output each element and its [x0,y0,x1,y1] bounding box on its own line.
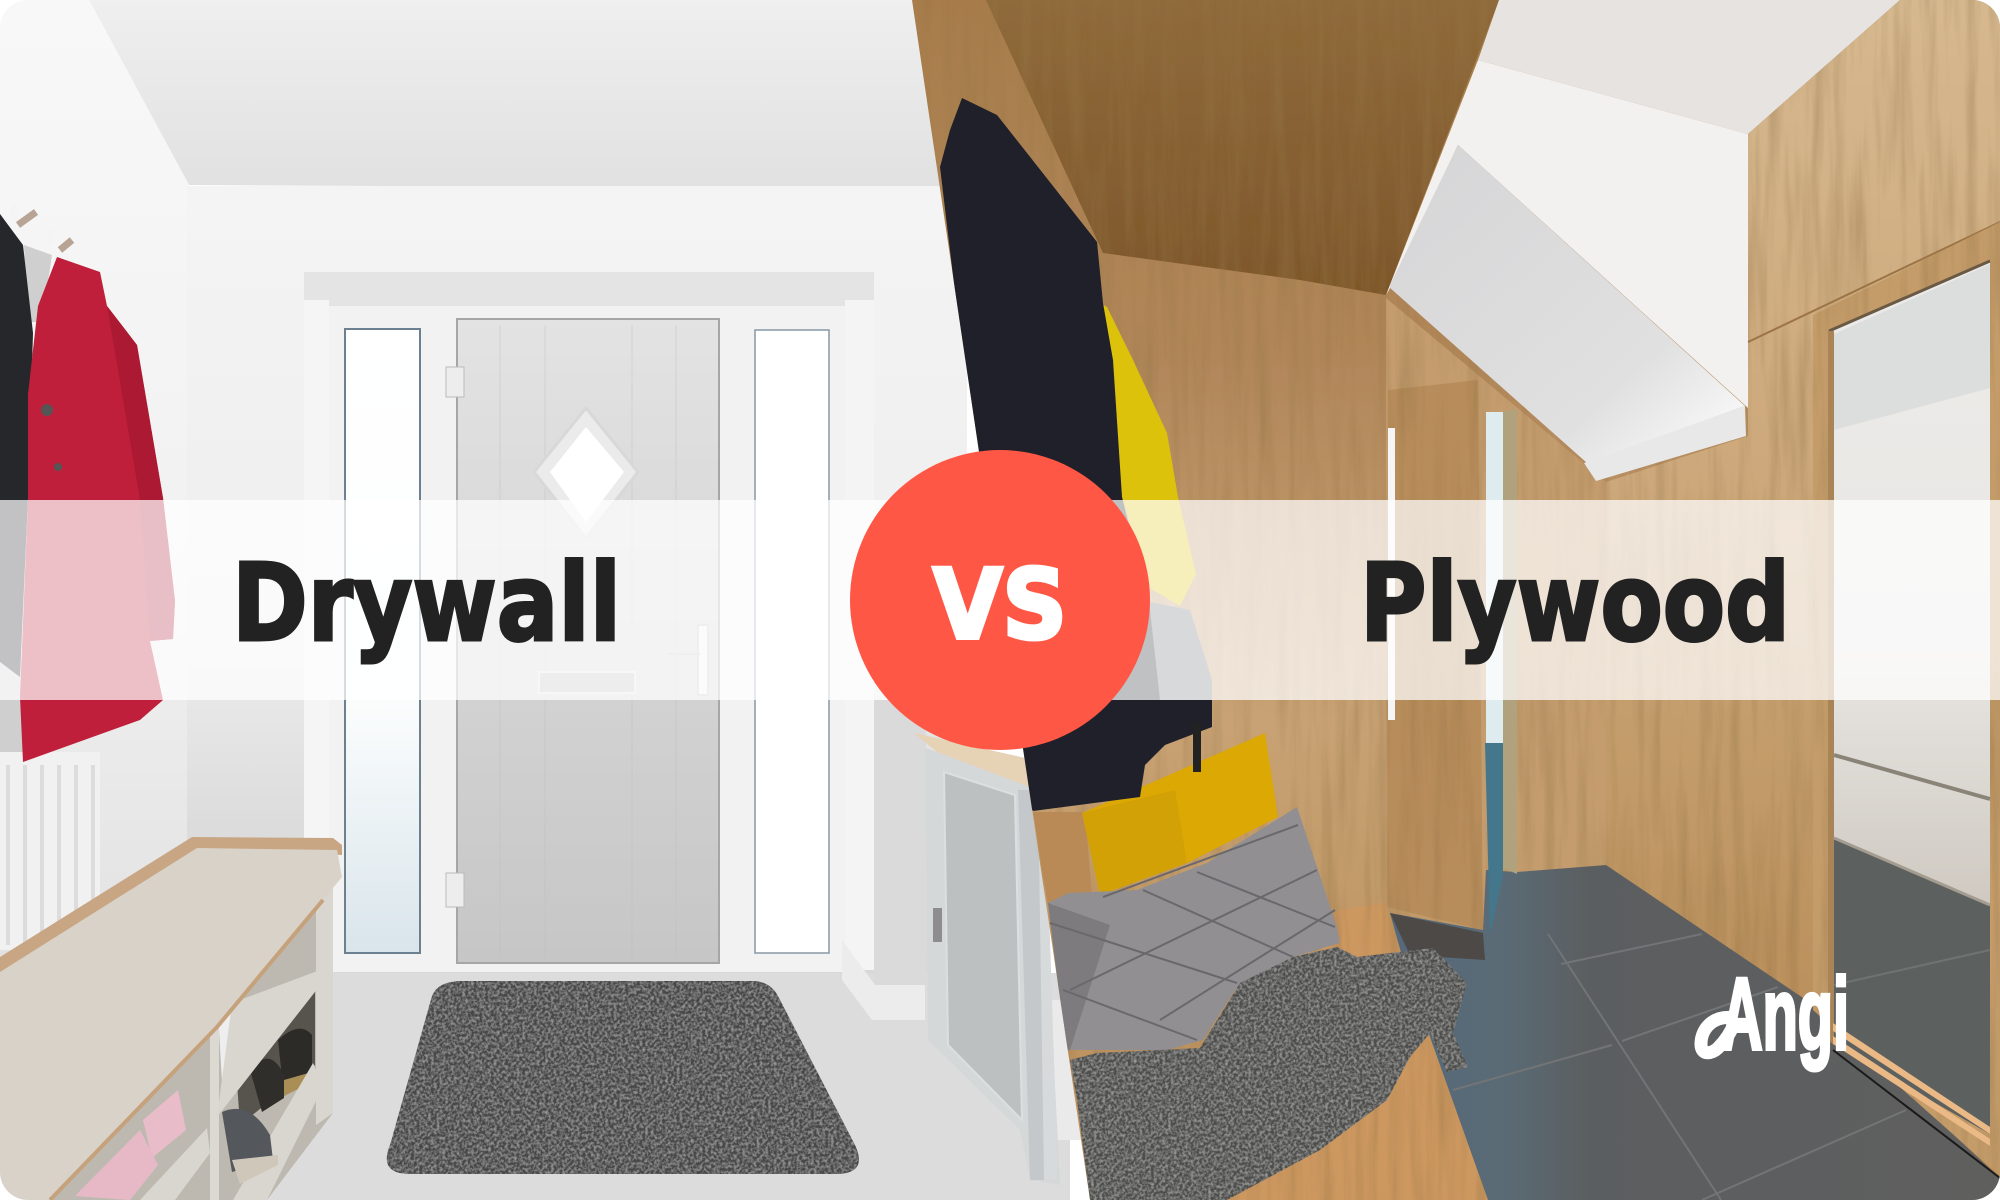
floor shadow under door [1390,913,1485,960]
door panel grooves [500,325,676,762]
soffit lip [1584,406,1746,481]
hinges [446,367,464,397]
shoes [219,1014,230,1080]
shelf interior shadow [238,992,315,1114]
floor tile joints [1453,934,1906,1200]
dark sleeve [107,306,175,641]
soffit [1389,145,1745,463]
door frame [329,700,845,972]
grey jacket [1140,600,1212,720]
logo: Angi: Angi [1721,957,1849,1071]
mirror ceiling reflection [1834,264,1990,430]
mirror floor [1833,838,1990,1134]
cabinet lock [933,908,942,942]
buttons [41,404,53,416]
wood bench [1227,903,1488,1200]
bench front edge [50,900,323,1200]
ceiling [89,0,945,189]
door mat [387,981,859,1174]
cabinet side [1018,790,1058,1180]
heading: Drywall: Drywall [232,542,621,666]
mirror frame [1813,222,2000,1176]
side wall [0,0,189,960]
door handle [1388,428,1395,720]
wood back wall [912,0,2000,1200]
yellow pillow [1082,733,1278,895]
wall behind cabinet [1052,1000,1081,1140]
radiator [0,752,100,950]
mirror frame top edge [1829,261,1990,331]
white wall [1386,60,1748,408]
panel: drywall entryway photo [0,0,1085,1200]
wood ceiling [986,0,1499,295]
wall panel joint [1748,222,2000,342]
grey blanket [1070,947,1468,1200]
letter box [539,672,635,693]
right side glass [755,330,829,953]
diamond window [536,411,636,500]
shelf boards [217,970,322,1117]
coat strap [1193,722,1201,772]
red coat [20,257,175,762]
bench cushion [0,848,342,1200]
floor [200,973,1070,1200]
door handle [668,625,708,695]
white shirt [24,245,52,322]
right wall lower [874,700,926,758]
door recess [304,272,874,970]
floor [1390,865,2000,1200]
white ceiling [1478,0,1900,134]
centre post [210,1027,219,1200]
wood door [1387,380,1483,930]
far wood wall [1386,298,1606,900]
bench shelf unit [50,880,333,1200]
wall under coats [0,684,22,752]
black jacket [0,214,33,677]
panel: plywood hallway photo [912,0,2000,1200]
door jamb [1503,409,1517,874]
band: translucent title strip [0,500,2000,700]
coat hooks [14,205,72,250]
skirting board [842,970,925,1020]
right post [316,880,333,1125]
front door [446,319,719,963]
heading: Plywood: Plywood [1360,542,1790,666]
mirror base stripes [1833,1023,2000,1178]
mirror [1828,261,1990,1134]
cabinet top [914,733,1030,787]
back wall [187,186,967,986]
wood below coat [1033,812,1092,905]
doorway opening [1485,409,1517,935]
left side glass [345,329,420,953]
badge: VS circle: VS [933,549,1067,661]
bench wood edge [0,837,342,974]
mirror frame left strip [1828,331,1834,1045]
badge: VS circle [850,450,1150,750]
mirror wardrobe [1829,261,1990,905]
grey pillow [1048,807,1340,1050]
logo: Angi [1701,957,1849,1071]
yellow jacket [1100,303,1196,606]
cabinet [914,733,1060,1185]
right wood wall [1606,0,2000,1180]
dark jacket [940,98,1212,811]
